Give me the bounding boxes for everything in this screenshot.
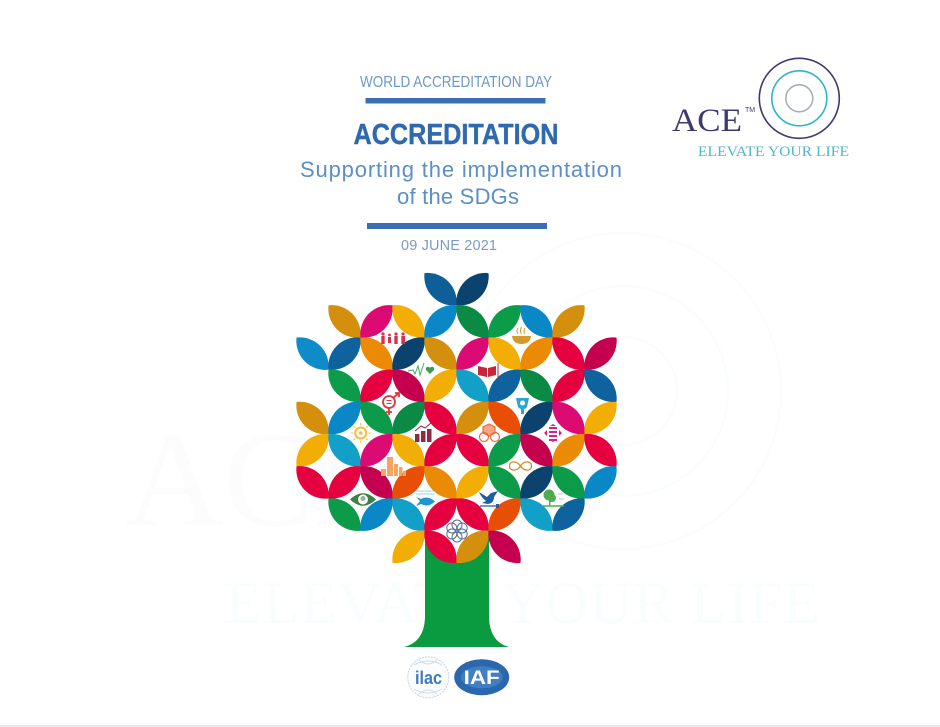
watermark: faded ACE logo: ACE bbox=[125, 405, 397, 555]
tree trunk bbox=[404, 530, 509, 647]
icon: people (no poverty) bbox=[381, 332, 405, 344]
logo: IAF: IAF bbox=[464, 668, 500, 689]
watermark: faded ACE logo bbox=[125, 233, 820, 636]
ACE logo: ELEVATE YOUR LIFE bbox=[698, 144, 849, 160]
icon: growth bar chart bbox=[415, 423, 432, 442]
icon: fish and water bbox=[416, 491, 435, 506]
icon: city skyline bbox=[381, 457, 406, 476]
bottom rule bbox=[367, 223, 547, 229]
icon: water goblet bbox=[516, 398, 529, 414]
ACE logo bbox=[672, 58, 849, 160]
icon: partnership flower bbox=[447, 520, 467, 542]
icon: gender equality bbox=[383, 393, 399, 415]
icon: infinity bbox=[510, 462, 532, 470]
subtitle: Supporting the implementation bbox=[300, 157, 622, 182]
ACE logo: TM bbox=[745, 107, 755, 114]
bottom edge line bbox=[0, 725, 940, 727]
icon: industry cubes bbox=[480, 424, 500, 442]
date: 09 JUNE 2021 bbox=[401, 238, 497, 254]
logo: ILAC bbox=[408, 657, 449, 698]
tree canopy of SDG-coloured petals bbox=[296, 273, 617, 563]
icon: tree on land bbox=[543, 490, 564, 506]
top rule bbox=[366, 98, 546, 104]
subtitle: of the SDGs bbox=[397, 184, 519, 209]
watermark: faded ACE logo: ELEVATE YOUR LIFE bbox=[225, 570, 820, 636]
icon: eye with tree bbox=[350, 493, 376, 506]
icon: reduced inequalities bbox=[544, 424, 562, 442]
icon: steaming bowl bbox=[512, 327, 531, 344]
icon: health pulse and heart bbox=[408, 363, 434, 375]
icon: sun bbox=[351, 423, 371, 443]
heading: World Accreditation Day: WORLD ACCREDITATION DAY bbox=[360, 74, 552, 91]
icon: dove bbox=[479, 491, 499, 508]
logo: ILAC: ilac bbox=[415, 668, 442, 688]
subtitle bbox=[300, 157, 622, 209]
ACE logo: ACE bbox=[672, 103, 742, 139]
icon: open book bbox=[478, 363, 498, 377]
title: Accreditation: ACCREDITATION bbox=[354, 119, 558, 151]
logo: IAF bbox=[454, 659, 509, 695]
